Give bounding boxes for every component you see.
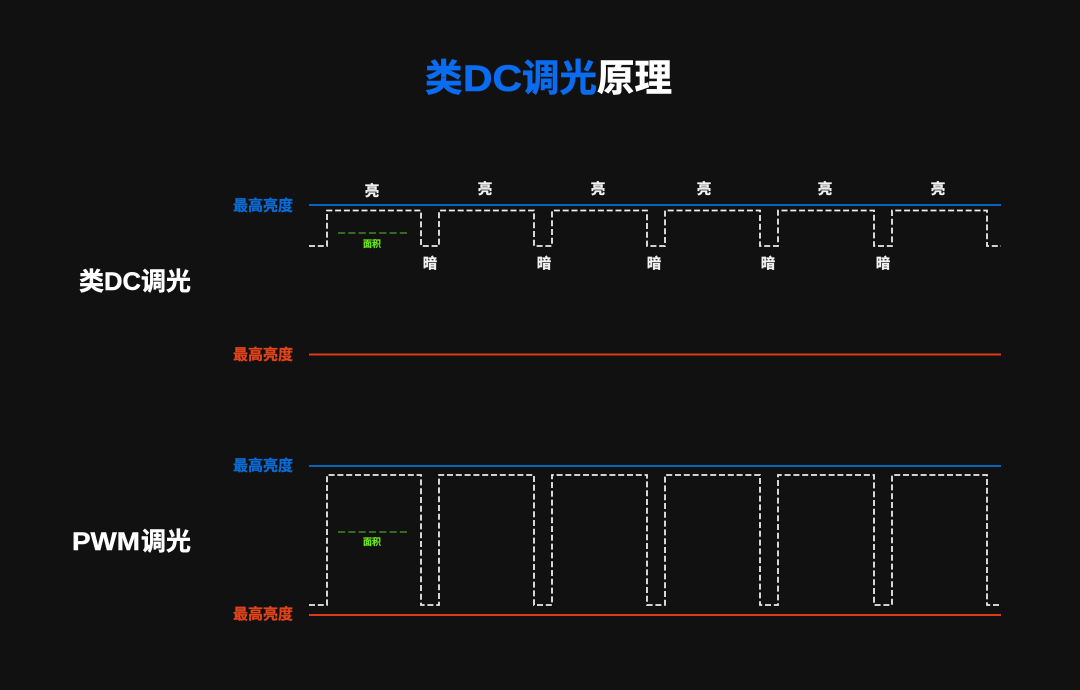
- area marker: 面积: [363, 239, 381, 249]
- dark labels: 暗: [537, 254, 552, 272]
- title: 类: [425, 57, 462, 99]
- title: DC: [463, 57, 522, 99]
- line: max brightness red: [309, 354, 1001, 356]
- bright labels: 亮: [697, 180, 711, 198]
- bright labels: [365, 180, 945, 200]
- dark labels: 暗: [423, 254, 438, 272]
- bright labels: 亮: [365, 182, 379, 200]
- dark labels: [423, 254, 891, 272]
- panel: DC-like dimming: [79, 180, 1001, 364]
- heading: DC-like dimming: DC: [104, 268, 141, 296]
- heading: DC-like dimming: [79, 268, 191, 296]
- dark labels: 暗: [647, 254, 662, 272]
- area marker: [338, 233, 408, 249]
- label: max brightness red: 最高亮度: [233, 346, 293, 364]
- area marker: [338, 532, 408, 547]
- area marker: 面积: [363, 537, 381, 547]
- label: max brightness red: 最高亮度: [233, 605, 293, 623]
- title: 调光: [522, 57, 597, 99]
- line: max brightness blue: [309, 465, 1001, 467]
- chart: dashed waveform: [309, 210, 1001, 246]
- heading: PWM dimming: [72, 528, 191, 556]
- line: max brightness red: [309, 614, 1001, 616]
- heading: PWM dimming: 调光: [141, 528, 191, 556]
- panel: PWM dimming: [72, 456, 1001, 623]
- chart: dashed waveform: [309, 475, 1001, 605]
- bright labels: 亮: [818, 180, 832, 198]
- heading: PWM dimming: PWM: [72, 528, 140, 556]
- heading: DC-like dimming: 调光: [141, 268, 191, 296]
- bright labels: 亮: [931, 180, 945, 198]
- title: [425, 57, 672, 99]
- bright labels: 亮: [591, 180, 605, 198]
- dark labels: 暗: [876, 254, 891, 272]
- label: max brightness blue: 最高亮度: [233, 456, 293, 474]
- dark labels: 暗: [761, 254, 776, 272]
- line: max brightness blue: [309, 204, 1001, 206]
- bright labels: 亮: [478, 180, 492, 198]
- title: 原理: [597, 57, 672, 99]
- label: max brightness blue: 最高亮度: [233, 196, 293, 214]
- heading: DC-like dimming: 类: [79, 268, 104, 296]
